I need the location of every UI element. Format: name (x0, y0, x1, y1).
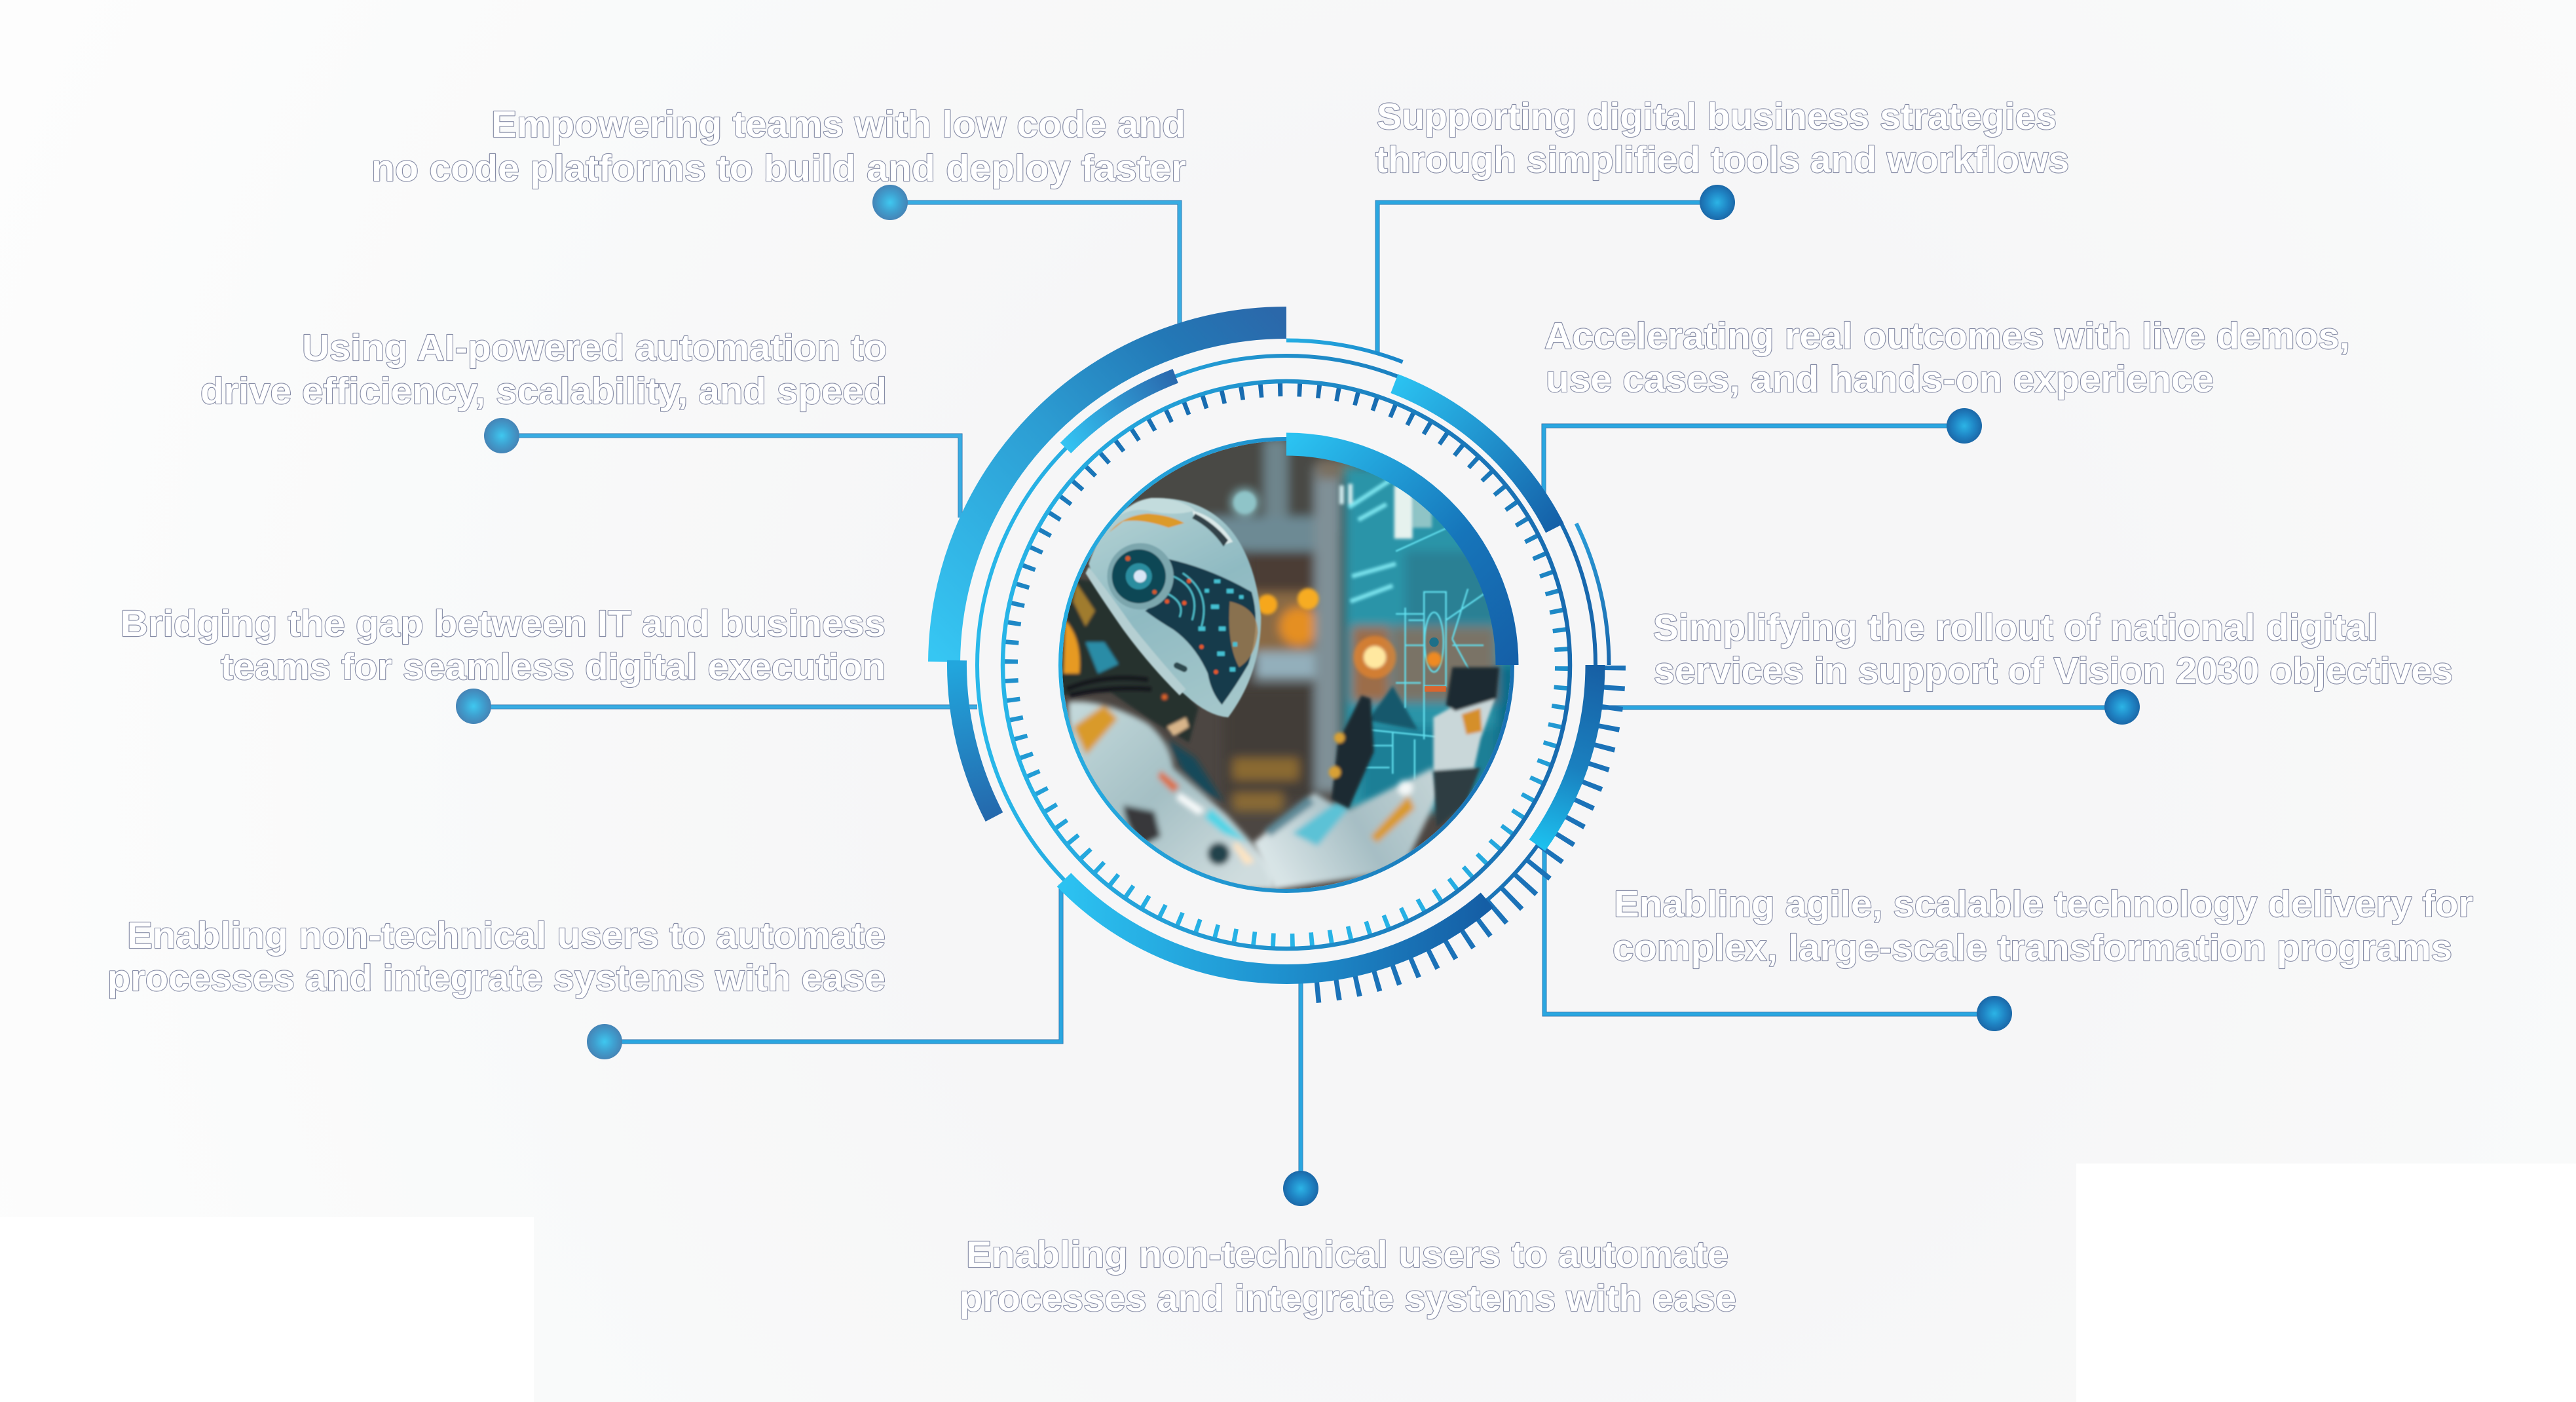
text: non-technical users bottom: Enabling non-technical users to automate (966, 1234, 1728, 1276)
text: non-technical users bottom: processes and integrate systems with ease (960, 1278, 1736, 1319)
text: digital business strategies: through simplified tools and workflows (1375, 139, 2069, 181)
text: low code platforms: Empowering teams with low code and (491, 104, 1185, 145)
text: non-technical users left: Enabling non-technical users to automate (127, 915, 886, 957)
robot right arm and hands (1253, 768, 1440, 890)
connector: IT and business (456, 689, 977, 724)
robot helmet (1085, 498, 1261, 717)
arc: inner highlight over photo (1286, 444, 1507, 665)
text: IT and business: Bridging the gap between IT and business (121, 603, 886, 645)
connector: agile delivery (1544, 845, 2012, 1031)
robot neck and rear (1057, 577, 1199, 742)
text: non-technical users bottom (960, 1234, 1736, 1319)
text: digital business strategies (1375, 96, 2069, 181)
outer ticks on lower right (1315, 665, 1611, 989)
text: national digital services: services in support of Vision 2030 objectives (1654, 650, 2453, 692)
tick ring around photo (1002, 381, 1571, 949)
thin middle ring (977, 356, 1596, 974)
arc: upper left segment (1066, 376, 1176, 448)
text: IT and business (121, 603, 886, 688)
arc: lower left (957, 660, 994, 817)
arc: thin right (1577, 523, 1609, 665)
text: real outcomes (1544, 315, 2350, 400)
text: AI-powered automation: drive efficiency, scalability, and speed (200, 370, 887, 412)
arc: thin top (1286, 341, 1403, 362)
connector: non-technical bottom (1283, 983, 1318, 1206)
connector: low code teams (872, 185, 1180, 328)
arc: bottom band (1064, 880, 1487, 974)
hologram line work (1361, 520, 1487, 780)
connector: real outcomes (1544, 408, 1982, 504)
text: non-technical users left: processes and integrate systems with ease (107, 957, 886, 999)
text: low code platforms (371, 104, 1186, 189)
text: IT and business: teams for seamless digital execution (221, 646, 886, 688)
robot shoulder and arm (1068, 702, 1277, 890)
text: real outcomes: use cases, and hands-on experience (1546, 358, 2214, 400)
connector: Vision 2030 (1601, 689, 2140, 725)
central photo: robot using holographic screen (1062, 441, 1510, 889)
text: agile technology delivery: Enabling agile, scalable technology delivery for (1614, 883, 2473, 925)
photo ring (1060, 439, 1512, 891)
text: real outcomes: Accelerating real outcomes with live demos, (1544, 315, 2350, 357)
arc: upper right band (1394, 384, 1555, 528)
arc: large upper left (944, 322, 1286, 662)
thin inner ring (1003, 381, 1570, 949)
text: low code platforms: no code platforms to build and deploy faster (371, 147, 1186, 189)
arc: right band (1537, 665, 1596, 845)
connector: non-technical left (587, 884, 1061, 1059)
connector: AI automation (484, 418, 960, 518)
text: digital business strategies: Supporting digital business strategies (1377, 96, 2057, 138)
text: national digital services (1653, 607, 2453, 692)
text: non-technical users left (107, 915, 886, 999)
text: AI-powered automation: Using AI-powered automation to (302, 327, 887, 369)
text: national digital services: Simplifying the rollout of national digital (1653, 607, 2378, 649)
text: agile technology delivery: complex, large-scale transformation programs (1613, 927, 2452, 969)
text: AI-powered automation (200, 327, 887, 412)
text: agile technology delivery (1613, 883, 2473, 969)
connector: digital strategies (1377, 185, 1735, 354)
